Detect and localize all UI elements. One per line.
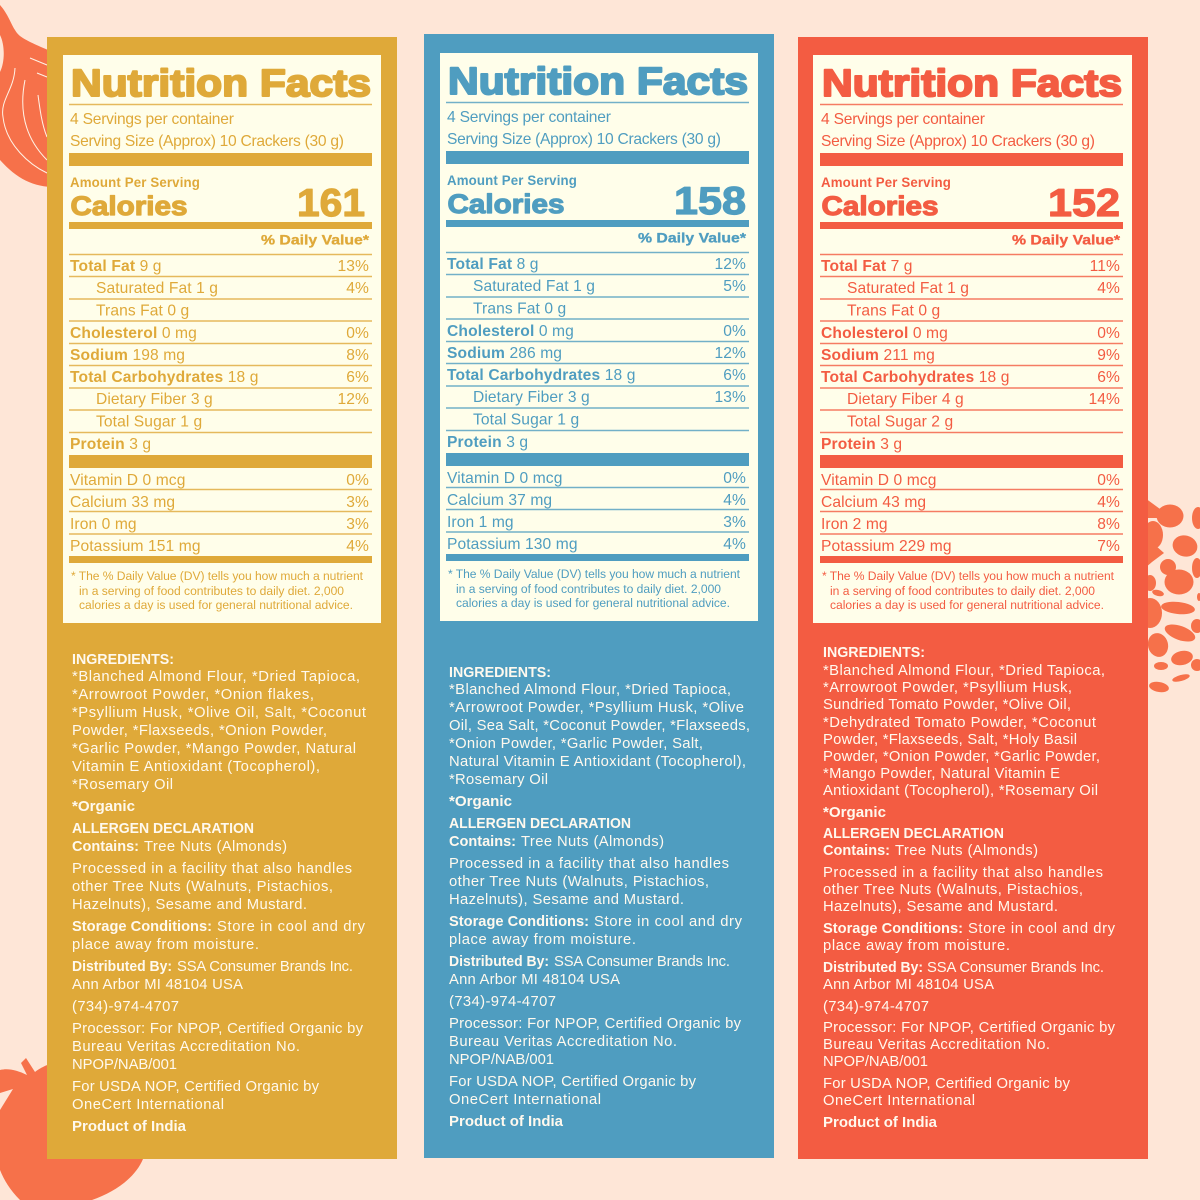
ingredients and allergen text: Powder, *Flaxseeds, Salt, *Holy Basil	[823, 732, 1077, 748]
nutrient rows: Total Carbohydrates 18 g	[70, 369, 258, 386]
footnote: calories a day is used for general nutritional advice.	[456, 596, 730, 610]
calories: Calories	[70, 191, 188, 221]
ingredients and allergen text: other Tree Nuts (Walnuts, Pistachios,	[72, 879, 333, 895]
nutrient rows: Total Sugar 1 g	[473, 412, 579, 428]
ingredients and allergen text: Store in cool and dry	[594, 914, 743, 930]
ingredients and allergen text: Processed in a facility that also handles	[449, 856, 729, 872]
ingredients and allergen text: *Dehydrated Tomato Powder, *Coconut	[823, 715, 1096, 731]
ingredients and allergen text: Distributed By:	[72, 959, 172, 975]
ingredients and allergen text: SSA Consumer Brands Inc.	[927, 960, 1104, 976]
nutrient rows: Total Sugar 1 g	[96, 414, 202, 430]
nutrient rows: Sodium 211 mg	[821, 347, 935, 364]
ingredients and allergen text: INGREDIENTS:	[823, 645, 925, 661]
ingredients and allergen text: *Arrowroot Powder, *Psyllium Husk,	[823, 680, 1072, 696]
ingredients and allergen text: Contains:	[449, 834, 516, 850]
ingredients and allergen text: (734)-974-4707	[823, 999, 929, 1015]
calories	[69, 175, 372, 229]
panel: gold nutrition label	[47, 37, 397, 1159]
icon: apple illustration	[0, 1058, 143, 1200]
nutrient rows: 12%	[715, 256, 746, 273]
ingredients and allergen text: Ann Arbor MI 48104 USA	[449, 972, 620, 988]
ingredients and allergen text: Storage Conditions:	[72, 919, 212, 935]
ingredients and allergen text: *Garlic Powder, *Mango Powder, Natural	[72, 741, 356, 757]
ingredients and allergen text: ALLERGEN DECLARATION	[449, 816, 631, 832]
nutrient rows: 12%	[338, 391, 369, 408]
serving information	[820, 104, 1123, 166]
ingredients and allergen text: Antioxidant (Tocopherol), *Rosemary Oil	[823, 783, 1098, 799]
ingredients and allergen text	[72, 652, 366, 1135]
ingredients and allergen text: NPOP/NAB/001	[449, 1052, 554, 1068]
calories	[446, 173, 749, 227]
nutrient rows: Total Carbohydrates 18 g	[447, 367, 635, 384]
vitamins and minerals: Iron 1 mg	[447, 514, 514, 531]
vitamins and minerals: 3%	[346, 516, 369, 533]
footnote	[822, 569, 1115, 612]
vitamins and minerals	[820, 472, 1123, 563]
ingredients and allergen text: Powder, *Flaxseeds, *Onion Powder,	[72, 723, 327, 739]
nutrient rows: 12%	[715, 345, 746, 362]
ingredients and allergen text: place away from moisture.	[823, 938, 1010, 954]
ingredients and allergen text: NPOP/NAB/001	[823, 1054, 928, 1070]
ingredients and allergen text: OneCert International	[449, 1092, 601, 1108]
footnote: in a serving of food contributes to daily diet. 2,000	[79, 584, 344, 598]
nutrient rows: Dietary Fiber 4 g	[847, 391, 964, 408]
footnote: * The % Daily Value (DV) tells you how much a nutrient	[822, 569, 1115, 583]
vitamins and minerals: Vitamin D 0 mcg	[70, 472, 185, 489]
footnote: in a serving of food contributes to daily diet. 2,000	[456, 582, 721, 596]
ingredients and allergen text: Hazelnuts), Sesame and Mustard.	[449, 892, 684, 908]
ingredients and allergen text: Distributed By:	[823, 960, 923, 976]
title: Nutrition Facts	[71, 63, 371, 105]
ingredients and allergen text: Hazelnuts), Sesame and Mustard.	[823, 899, 1058, 915]
nutrient rows: 11%	[1090, 258, 1120, 275]
ingredients and allergen text: OneCert International	[823, 1093, 975, 1109]
ingredients and allergen text: *Onion Powder, *Garlic Powder, Salt,	[449, 736, 703, 752]
ingredients and allergen text: other Tree Nuts (Walnuts, Pistachios,	[823, 882, 1083, 898]
ingredients and allergen text: Ann Arbor MI 48104 USA	[72, 977, 243, 993]
nutrient rows: Sodium 198 mg	[70, 347, 185, 364]
ingredients and allergen text: Hazelnuts), Sesame and Mustard.	[72, 897, 307, 913]
vitamins and minerals: Calcium 37 mg	[447, 492, 552, 509]
ingredients and allergen text: Tree Nuts (Almonds)	[521, 834, 664, 850]
ingredients and allergen text: *Blanched Almond Flour, *Dried Tapioca,	[72, 669, 360, 685]
title: Nutrition Facts	[822, 63, 1122, 105]
nutrient rows: 8%	[346, 347, 369, 364]
ingredients and allergen text: INGREDIENTS:	[449, 665, 551, 681]
nutrient rows: 5%	[723, 278, 746, 295]
vitamins and minerals: 8%	[1097, 516, 1120, 533]
ingredients and allergen text: Product of India	[823, 1115, 938, 1131]
footnote: calories a day is used for general nutritional advice.	[830, 598, 1104, 612]
serving information	[69, 104, 372, 166]
ingredients and allergen text: other Tree Nuts (Walnuts, Pistachios,	[449, 874, 709, 890]
ingredients and allergen text: ALLERGEN DECLARATION	[72, 821, 254, 837]
vitamins and minerals: 3%	[723, 514, 746, 531]
ingredients and allergen text: Tree Nuts (Almonds)	[144, 839, 287, 855]
vitamins and minerals: Vitamin D 0 mcg	[821, 472, 936, 489]
ingredients and allergen text: *Organic	[449, 794, 512, 810]
nutrient rows: 6%	[346, 369, 369, 386]
nutrient rows: Saturated Fat 1 g	[473, 278, 595, 295]
nutrient rows: Cholesterol 0 mg	[70, 325, 197, 342]
vitamins and minerals: 3%	[346, 494, 369, 511]
nutrient rows	[446, 252, 749, 466]
vitamins and minerals: 4%	[723, 492, 746, 509]
ingredients and allergen text: Bureau Veritas Accreditation No.	[449, 1034, 677, 1050]
vitamins and minerals: Calcium 43 mg	[821, 494, 926, 511]
nutrient rows: 14%	[1089, 391, 1120, 408]
card: nutrition facts	[440, 53, 758, 621]
icon: seed pattern	[1138, 498, 1200, 694]
ingredients and allergen text: *Organic	[72, 799, 135, 815]
nutrient rows: 13%	[715, 389, 746, 406]
ingredients and allergen text: Tree Nuts (Almonds)	[895, 843, 1038, 859]
vitamins and minerals: Potassium 229 mg	[821, 538, 952, 555]
ingredients and allergen text: *Arrowroot Powder, *Onion flakes,	[72, 687, 314, 703]
nutrient rows: Trans Fat 0 g	[473, 300, 566, 318]
ingredients and allergen text: Distributed By:	[449, 954, 549, 970]
calories: Calories	[822, 191, 938, 221]
vitamins and minerals: 7%	[1097, 538, 1120, 555]
calories: 152	[1048, 182, 1120, 225]
serving information: 4 Servings per container	[821, 111, 985, 128]
serving information	[446, 102, 749, 164]
ingredients and allergen text: *Rosemary Oil	[449, 772, 548, 788]
nutrient rows: Saturated Fat 1 g	[847, 280, 969, 297]
card: nutrition facts	[813, 55, 1132, 623]
ingredients and allergen text: For USDA NOP, Certified Organic by	[449, 1074, 697, 1090]
ingredients and allergen text: NPOP/NAB/001	[72, 1057, 177, 1073]
nutrient rows: Protein 3 g	[447, 434, 528, 451]
ingredients and allergen text: INGREDIENTS:	[72, 652, 174, 668]
nutrient rows: Cholesterol 0 mg	[821, 325, 948, 342]
footnote: in a serving of food contributes to daily diet. 2,000	[830, 584, 1095, 598]
panel: red nutrition label	[798, 37, 1148, 1159]
vitamins and minerals: Iron 0 mg	[70, 516, 137, 533]
footnote: * The % Daily Value (DV) tells you how much a nutrient	[71, 569, 364, 583]
ingredients and allergen text: SSA Consumer Brands Inc.	[177, 959, 353, 975]
nutrient rows: Trans Fat 0 g	[847, 302, 940, 320]
vitamins and minerals: 4%	[1097, 494, 1120, 511]
nutrient rows: 4%	[346, 280, 369, 297]
ingredients and allergen text: (734)-974-4707	[449, 994, 556, 1010]
nutrient rows: 6%	[723, 367, 746, 384]
ingredients and allergen text: For USDA NOP, Certified Organic by	[823, 1076, 1071, 1092]
ingredients and allergen text: Storage Conditions:	[823, 921, 963, 937]
vitamins and minerals: 0%	[346, 472, 369, 489]
nutrient rows	[69, 254, 372, 468]
ingredients and allergen text: Bureau Veritas Accreditation No.	[823, 1037, 1050, 1053]
nutrient rows: 4%	[1097, 280, 1120, 297]
ingredients and allergen text: *Mango Powder, Natural Vitamin E	[823, 766, 1060, 782]
ingredients and allergen text	[823, 645, 1116, 1131]
nutrient rows: Total Sugar 2 g	[847, 414, 953, 430]
nutrient rows: Dietary Fiber 3 g	[473, 389, 590, 406]
nutrient rows: Total Fat 7 g	[821, 258, 913, 275]
panel: blue nutrition label	[424, 34, 774, 1158]
ingredients and allergen text: OneCert International	[72, 1097, 224, 1113]
ingredients and allergen text: Oil, Sea Salt, *Coconut Powder, *Flaxseeds,	[449, 718, 750, 734]
nutrient rows: Saturated Fat 1 g	[96, 280, 218, 297]
footnote: calories a day is used for general nutritional advice.	[79, 598, 353, 612]
nutrient rows: 0%	[723, 323, 746, 340]
daily value heading: % Daily Value*	[1012, 232, 1121, 248]
ingredients and allergen text: place away from moisture.	[72, 937, 259, 953]
title: Nutrition Facts	[448, 61, 748, 103]
vitamins and minerals: Calcium 33 mg	[70, 494, 175, 511]
nutrient rows	[820, 254, 1123, 468]
vitamins and minerals: 4%	[723, 536, 746, 553]
ingredients and allergen text	[449, 665, 750, 1130]
ingredients and allergen text: Powder, *Onion Powder, *Garlic Powder,	[823, 749, 1100, 765]
nutrient rows: Sodium 286 mg	[447, 345, 562, 362]
nutrient rows: Dietary Fiber 3 g	[96, 391, 213, 408]
nutrient rows: Total Fat 8 g	[447, 256, 539, 273]
ingredients and allergen text: (734)-974-4707	[72, 999, 179, 1015]
ingredients and allergen text: Processor: For NPOP, Certified Organic by	[72, 1021, 364, 1037]
vitamins and minerals	[446, 470, 749, 561]
ingredients and allergen text: *Arrowroot Powder, *Psyllium Husk, *Olive	[449, 700, 744, 716]
calories: 158	[674, 180, 746, 223]
vitamins and minerals	[69, 472, 372, 563]
calories: Amount Per Serving	[447, 173, 577, 188]
nutrient rows: 9%	[1097, 347, 1120, 364]
ingredients and allergen text: place away from moisture.	[449, 932, 636, 948]
vitamins and minerals: Iron 2 mg	[821, 516, 888, 533]
nutrient rows: Total Carbohydrates 18 g	[821, 369, 1009, 386]
vitamins and minerals: Potassium 130 mg	[447, 536, 578, 553]
nutrient rows: Trans Fat 0 g	[96, 302, 189, 320]
footnote	[448, 567, 741, 610]
serving information: Serving Size (Approx) 10 Crackers (30 g)	[447, 131, 721, 148]
vitamins and minerals: 0%	[723, 470, 746, 487]
calories: Amount Per Serving	[821, 175, 951, 190]
ingredients and allergen text: Ann Arbor MI 48104 USA	[823, 977, 994, 993]
ingredients and allergen text: Contains:	[823, 843, 890, 859]
vitamins and minerals: Vitamin D 0 mcg	[447, 470, 562, 487]
icon: onion illustration	[0, 5, 60, 187]
ingredients and allergen text: *Blanched Almond Flour, *Dried Tapioca,	[449, 682, 731, 698]
calories: 161	[297, 182, 365, 225]
ingredients and allergen text: *Rosemary Oil	[72, 777, 173, 793]
footnote	[71, 569, 364, 612]
ingredients and allergen text: Processor: For NPOP, Certified Organic by	[823, 1020, 1116, 1036]
ingredients and allergen text: Bureau Veritas Accreditation No.	[72, 1039, 300, 1055]
calories	[820, 175, 1123, 229]
nutrient rows: Cholesterol 0 mg	[447, 323, 574, 340]
nutrient rows: 13%	[338, 258, 369, 275]
ingredients and allergen text: Contains:	[72, 839, 139, 855]
ingredients and allergen text: Processed in a facility that also handles	[823, 865, 1103, 881]
ingredients and allergen text: *Organic	[823, 805, 886, 821]
ingredients and allergen text: Processed in a facility that also handles	[72, 861, 352, 877]
footnote: * The % Daily Value (DV) tells you how much a nutrient	[448, 567, 741, 581]
nutrient rows: 0%	[346, 325, 369, 342]
ingredients and allergen text: Store in cool and dry	[217, 919, 366, 935]
ingredients and allergen text: *Psyllium Husk, *Olive Oil, Salt, *Coconut	[72, 705, 366, 721]
ingredients and allergen text: For USDA NOP, Certified Organic by	[72, 1079, 320, 1095]
nutrient rows: 6%	[1097, 369, 1120, 386]
daily value heading: % Daily Value*	[638, 230, 747, 246]
daily value heading: % Daily Value*	[261, 232, 370, 248]
ingredients and allergen text: ALLERGEN DECLARATION	[823, 826, 1004, 842]
serving information: Serving Size (Approx) 10 Crackers (30 g)	[821, 133, 1095, 150]
ingredients and allergen text: Natural Vitamin E Antioxidant (Tocopherol),	[449, 754, 746, 770]
ingredients and allergen text: *Blanched Almond Flour, *Dried Tapioca,	[823, 663, 1105, 679]
ingredients and allergen text: Product of India	[72, 1119, 187, 1135]
vitamins and minerals: 4%	[346, 538, 369, 555]
ingredients and allergen text: Storage Conditions:	[449, 914, 589, 930]
calories: Calories	[448, 189, 564, 219]
ingredients and allergen text: Vitamin E Antioxidant (Tocopherol),	[72, 759, 320, 775]
vitamins and minerals: 0%	[1097, 472, 1120, 489]
serving information: 4 Servings per container	[447, 109, 611, 126]
nutrient rows: Protein 3 g	[70, 436, 151, 453]
vitamins and minerals: Potassium 151 mg	[70, 538, 201, 555]
nutrient rows: Total Fat 9 g	[70, 258, 162, 275]
nutrient rows: 0%	[1097, 325, 1120, 342]
ingredients and allergen text: Processor: For NPOP, Certified Organic by	[449, 1016, 742, 1032]
card: nutrition facts	[63, 55, 381, 623]
ingredients and allergen text: SSA Consumer Brands Inc.	[554, 954, 730, 970]
ingredients and allergen text: Product of India	[449, 1114, 564, 1130]
serving information: Serving Size (Approx) 10 Crackers (30 g)	[70, 133, 344, 150]
calories: Amount Per Serving	[70, 175, 200, 190]
serving information: 4 Servings per container	[70, 111, 234, 128]
ingredients and allergen text: Store in cool and dry	[968, 921, 1116, 937]
nutrient rows: Protein 3 g	[821, 436, 902, 453]
ingredients and allergen text: Sundried Tomato Powder, *Olive Oil,	[823, 697, 1071, 713]
